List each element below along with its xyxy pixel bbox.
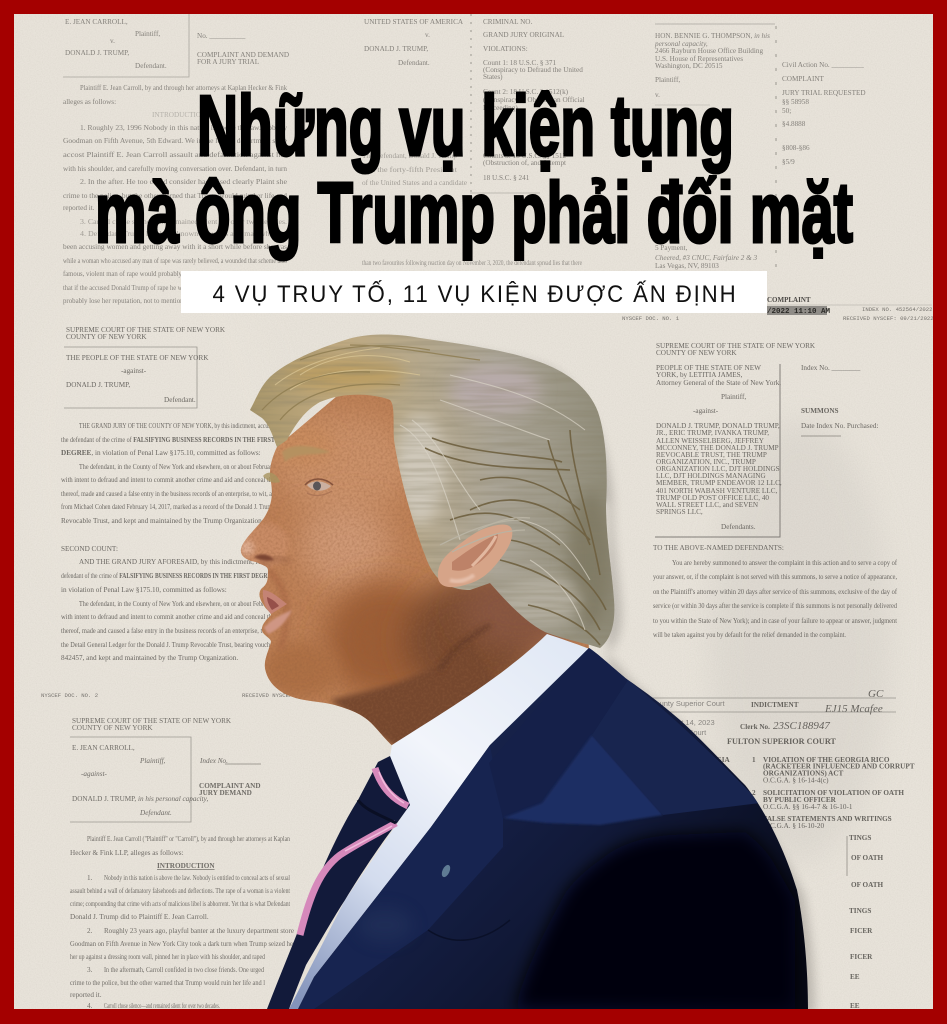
- document: E. Jean Carroll complaint, top left: COMPLAINT AND DEMAND: [197, 51, 289, 59]
- document stamps: left footer: [41, 692, 292, 699]
- document: E. Jean Carroll complaint, bottom left: Nobody in this nation is above the law. Nobody is entitled to conceal acts of sexual: [104, 874, 290, 882]
- document stamps: left footer: RECEIVED NYSCEF: [242, 692, 292, 699]
- document: Thompson civil complaint, top right: Plaintiff,: [655, 76, 680, 84]
- document: Thompson civil complaint, top right: §§ 58958: [782, 98, 809, 106]
- subtitle banner: [181, 271, 767, 313]
- document: E. Jean Carroll complaint, top left: INTRODUCTION: [152, 111, 207, 119]
- document: Thompson civil complaint, top right: v.: [655, 91, 660, 99]
- document: Letitia James summons, right: 401 NORTH WABASH VENTURE LLC,: [656, 487, 777, 495]
- document: E. Jean Carroll complaint, bottom left: 2.: [87, 927, 93, 935]
- document: Fulton County indictment, bottom right: Clerk of Court: [660, 728, 707, 737]
- document: E. Jean Carroll complaint, bottom left: COMPLAINT AND: [199, 782, 261, 790]
- document: E. Jean Carroll complaint, bottom left: Plaintiff E. Jean Carroll ("Plaintiff" or "Carroll"), by and through her attorneys at Kaplan: [87, 835, 290, 843]
- document: E. Jean Carroll complaint, bottom left: her up against a dressing room wall, pinned her in place with his shoulder, and raped: [70, 953, 265, 961]
- document: Letitia James summons, right: will be taken against you by default for the relief demanded in the complaint.: [653, 631, 846, 639]
- document: People of New York indictment, left: thereof, made and caused a false entry in the business records of an enterprise, to wit, an: [61, 490, 275, 498]
- document: Fulton County indictment, bottom right: FICER: [850, 927, 873, 935]
- document: E. Jean Carroll complaint, top left: 4. Defendant Trump had been known for years as a man who had: [80, 230, 287, 238]
- document: People of New York indictment, left: SECOND COUNT:: [61, 545, 118, 553]
- document: People of New York indictment, left: The defendant, in the County of New York and elsewhere, on or about February: [79, 463, 275, 471]
- document stamps: NYSCEF header: NYSCEF DOC. NO. 1: [622, 315, 680, 322]
- document: E. Jean Carroll complaint, top left: that if the accused Donald Trump of rape he would sue her into oblivion and she would: [63, 284, 287, 292]
- document: People of New York indictment, left: from Michael Cohen dated February 14, 2017, marked as a record of the Donald J. Trump: [61, 503, 275, 511]
- document: Letitia James summons, right: TO THE ABOVE-NAMED DEFENDANTS:: [653, 544, 784, 552]
- document: United States indictment, top centre: GRAND JURY ORIGINAL: [483, 31, 564, 39]
- document: People of New York indictment, left: thereof, made and caused a false entry in the business records of an enterprise, to wit: [61, 627, 275, 635]
- document: People of New York indictment, left: Defendant.: [164, 396, 196, 404]
- document: Fulton County indictment, bottom right: O.C.G.A. § 16-14-4(c): [763, 776, 829, 784]
- document: E. Jean Carroll complaint, bottom left: Index No.: [199, 757, 228, 765]
- document: People of New York indictment, left: THE PEOPLE OF THE STATE OF NEW YORK: [66, 354, 209, 362]
- document: Letitia James summons, right: service (or within 30 days after the service is complete if this summons is not personally delivered: [653, 602, 897, 610]
- document: United States indictment, top centre: VIOLATIONS:: [483, 45, 528, 53]
- document: Thompson civil complaint, top right: §4.8888: [782, 120, 806, 128]
- document: E. Jean Carroll complaint, bottom left: Roughly 23 years ago, playful banter at the luxury department store: [104, 927, 294, 935]
- document: Thompson civil complaint, top right: U.S. House of Representatives: [655, 55, 743, 63]
- document: Fulton County indictment, bottom right: FALSE STATEMENTS AND WRITINGS: [763, 815, 892, 823]
- document: E. Jean Carroll complaint, top left: reported it.: [63, 204, 95, 212]
- document: E. Jean Carroll complaint, bottom left: reported it.: [70, 991, 102, 999]
- document: E. Jean Carroll complaint, bottom left: Donald J. Trump did to Plaintiff E. Jean Carroll.: [70, 913, 209, 921]
- document: Letitia James summons, right: PEOPLE OF THE STATE OF NEW: [656, 364, 761, 372]
- document: United States indictment, top centre: 18 U.S.C. § 241: [483, 174, 530, 182]
- document: Letitia James summons, right: Defendants.: [721, 523, 756, 531]
- document: Fulton County indictment, bottom right: FICER: [850, 953, 873, 961]
- document: United States indictment, top centre: CRIMINAL NO.: [483, 18, 532, 26]
- document: E. Jean Carroll complaint, top left: accost Plaintiff E. Jean Carroll assault and defamation against her: [63, 151, 288, 159]
- face and neck: [240, 394, 589, 746]
- document: United States indictment, top centre: than two favourites following reaction day on November 3, 2020, the defendant spread lies that there: [362, 259, 582, 267]
- document: People of New York indictment, left: -against-: [121, 367, 147, 375]
- document: Fulton County indictment, bottom right: OF OATH: [851, 881, 884, 889]
- document: Letitia James summons, right: Index No. ________: [801, 364, 861, 372]
- document: Letitia James summons, right: on the Plaintiff's attorney within 20 days after service of this summons, exclusive of the day of: [653, 588, 898, 596]
- document: Fulton County indictment, bottom right: EJ15 Mcafee: [824, 703, 883, 715]
- document: Letitia James summons, right: LLC, DJT HOLDINGS MANAGING: [656, 472, 766, 480]
- document: E. Jean Carroll complaint, bottom left: assault behind a wall of defamatory falsehoods and deflections. The rape of a woman is a violent: [70, 887, 290, 895]
- document: E. Jean Carroll complaint, top left: [63, 14, 289, 305]
- document: Fulton County indictment, bottom right: Clerk No.: [740, 723, 770, 731]
- document: Letitia James summons, right: MCCONNEY, THE DONALD J. TRUMP: [656, 444, 779, 452]
- document: Thompson civil complaint, top right: [654, 24, 866, 270]
- hair: [245, 330, 620, 650]
- document: E. Jean Carroll complaint, top left: while a woman who accused any man of rape was rarely believed, a wounded that scheme also: [63, 257, 287, 265]
- document: Fulton County indictment, bottom right: VIOLATION OF THE GEORGIA RICO: [763, 756, 890, 764]
- document: E. Jean Carroll complaint, bottom left: Carroll chose silence—and remained silent for over two decades.: [104, 1002, 220, 1010]
- document: United States indictment, top centre: DONALD J. TRUMP,: [364, 45, 428, 53]
- document: Fulton County indictment, bottom right: [650, 688, 915, 1010]
- document: Letitia James summons, right: REVOCABLE TRUST, THE TRUMP: [656, 451, 767, 459]
- document: Fulton County indictment, bottom right: O.C.G.A. §§ 16-4-7 & 16-10-1: [763, 803, 853, 811]
- document stamps: NYSCEF header: RECEIVED NYSCEF: 09/21/2022: [843, 315, 934, 322]
- document: E. Jean Carroll complaint, bottom left: In the aftermath, Carroll confided in two close friends. One urged: [104, 966, 264, 974]
- document: Thompson civil complaint, top right: HON. BENNIE G. THOMPSON, in his: [655, 32, 770, 40]
- document: Letitia James summons, right: SUMMONS: [801, 407, 839, 415]
- document: E. Jean Carroll complaint, bottom left: Hecker & Fink LLP, alleges as follows:: [70, 849, 184, 857]
- necktie: [267, 756, 410, 1009]
- document: Letitia James summons, right: You are hereby summoned to answer the complaint in this action and to serve a copy of: [672, 559, 898, 567]
- document: E. Jean Carroll complaint, top left: DONALD J. TRUMP,: [65, 49, 129, 57]
- document: E. Jean Carroll complaint, bottom left: COUNTY OF NEW YORK: [72, 724, 153, 732]
- document: United States indictment, top centre: UNITED STATES OF AMERICA: [364, 18, 464, 26]
- document: Letitia James summons, right: ORGANIZATION LLC, DJT HOLDINGS: [656, 465, 780, 473]
- document: Thompson civil complaint, top right: COMPLAINT: [782, 75, 825, 83]
- document: E. Jean Carroll complaint, bottom left: E. JEAN CARROLL,: [72, 744, 135, 752]
- portrait: Donald Trump in profile: [235, 330, 815, 1014]
- title: [95, 79, 853, 261]
- document: People of New York indictment, left: in violation of Penal Law §175.10, committed as follows:: [61, 586, 227, 594]
- subtitle banner: 4 VỤ TRUY TỐ, 11 VỤ KIỆN ĐƯỢC ẤN ĐỊNH: [212, 280, 738, 308]
- document: United States indictment, top centre: was the forty-fifth President: [362, 166, 457, 174]
- document: E. Jean Carroll complaint, bottom left: Defendant.: [139, 809, 172, 817]
- document: E. Jean Carroll complaint, top left: FOR A JURY TRIAL: [197, 58, 259, 66]
- document: Letitia James summons, right: SUPREME COURT OF THE STATE OF NEW YORK: [656, 342, 816, 350]
- document: E. Jean Carroll complaint, top left: Plaintiff,: [135, 30, 160, 38]
- document: People of New York indictment, left: The defendant, in the County of New York and elsewhere, on or about February: [79, 600, 275, 608]
- shirt and collar: [289, 634, 592, 1009]
- document: E. Jean Carroll complaint, bottom left: Plaintiff,: [139, 757, 166, 765]
- document: Fulton County indictment, bottom right: 1: [752, 756, 756, 764]
- document: E. Jean Carroll complaint, bottom left: 3.: [87, 966, 93, 974]
- document: E. Jean Carroll complaint, top left: famous, violent man of rape would probably lose everything and no one would ever: [63, 270, 288, 278]
- document: Letitia James summons, right: YORK, by LETITIA JAMES,: [656, 371, 743, 379]
- document: Letitia James summons, right: COUNTY OF NEW YORK: [656, 349, 737, 357]
- document: E. Jean Carroll complaint, top left: alleges as follows:: [63, 98, 116, 106]
- document: E. Jean Carroll complaint, bottom left: INTRODUCTION: [157, 862, 215, 870]
- document: Fulton County indictment, bottom right: EE: [850, 1002, 860, 1010]
- document: People of New York indictment, left: [61, 326, 276, 662]
- document: Thompson civil complaint, top right: Washington, DC 20515: [655, 62, 723, 70]
- document: E. Jean Carroll complaint, top left: Goodman on Fifth Avenue, 5th Edward. We in the luxury department store: [63, 137, 287, 145]
- document: Thompson civil complaint, top right: personal capacity,: [654, 40, 708, 48]
- document: People of New York indictment, left: COUNTY OF NEW YORK: [66, 333, 147, 341]
- document: E. Jean Carroll complaint, top left: crime to the police, but the other warned that Trump would ruin her life and: [63, 192, 287, 200]
- document: United States indictment, top centre: [362, 14, 585, 267]
- document: People of New York indictment, left: SUPREME COURT OF THE STATE OF NEW YORK: [66, 326, 226, 334]
- document: United States indictment, top centre: States): [483, 73, 503, 81]
- document: Letitia James summons, right: TRUMP OLD POST OFFICE LLC, 40: [656, 494, 769, 502]
- document: Thompson civil complaint, top right: Las Vegas, NV, 89103: [655, 262, 719, 270]
- document: E. Jean Carroll complaint, top left: E. JEAN CARROLL,: [65, 18, 128, 26]
- icon: lapel pin: [440, 864, 452, 878]
- document: Letitia James summons, right: -against-: [693, 407, 719, 415]
- document: Fulton County indictment, bottom right: 2: [752, 789, 756, 797]
- document: E. Jean Carroll complaint, top left: probably lose her reputation, not to mention everything she had worked for in life: [63, 297, 287, 305]
- document: Fulton County indictment, bottom right: ORGANIZATIONS) ACT: [763, 770, 844, 778]
- document: E. Jean Carroll complaint, bottom left: crime to the police, but the other warned that Trump would ruin her life and l: [70, 979, 265, 987]
- document: Thompson civil complaint, top right: 50;: [782, 107, 791, 115]
- document: People of New York indictment, left: AND THE GRAND JURY AFORESAID, by this indictment, further: [79, 558, 276, 566]
- document: People of New York indictment, left: with intent to defraud and intent to commit another crime and aid and conceal the: [61, 476, 275, 484]
- document: Fulton County indictment, bottom right: TINGS: [849, 907, 871, 915]
- document: Fulton County indictment, bottom right: EE: [850, 973, 860, 981]
- document: E. Jean Carroll complaint, bottom left: DONALD J. TRUMP, in his personal capacity,: [72, 795, 208, 803]
- document: E. Jean Carroll complaint, top left: 1. Roughly 23, 1996 Nobody in this nation is above the law. Nobody: [80, 124, 287, 132]
- document: Fulton County indictment, bottom right: County Superior Court: [650, 699, 726, 708]
- document: People of New York indictment, left: with intent to defraud and intent to commit another crime and aid and conceal the: [61, 613, 275, 621]
- document: Letitia James summons, right: to you within the State of New York); and in case of your failure to appear or answer, judgment: [653, 617, 897, 625]
- document: Fulton County indictment, bottom right: INDICTMENT: [751, 701, 799, 709]
- document: People of New York indictment, left: DEGREE, in violation of Penal Law §175.10, committed as follows:: [61, 449, 261, 457]
- document: Fulton County indictment, bottom right: O.C.G.A. § 16-10-20: [763, 822, 824, 830]
- document: Fulton County indictment, bottom right: FULTON SUPERIOR COURT: [727, 737, 836, 746]
- document: United States indictment, top centre: (Conspiracy to Obstruct an Official: [483, 96, 585, 104]
- document: Fulton County indictment, bottom right: (RACKETEER INFLUENCED AND CORRUPT: [763, 762, 915, 770]
- document: Thompson civil complaint, top right: §808-§86: [782, 144, 810, 152]
- document: Letitia James summons, right: Date Index No. Purchased:: [801, 422, 878, 430]
- document: Fulton County indictment, bottom right: BY PUBLIC OFFICER: [763, 796, 837, 804]
- document: People of New York indictment, left: DONALD J. TRUMP,: [66, 381, 130, 389]
- document: E. Jean Carroll complaint, top left: Defendant.: [135, 62, 167, 70]
- document: Fulton County indictment, bottom right: August 14, 2023: [660, 718, 715, 727]
- document stamps: left footer: NYSCEF DOC. NO. 2: [41, 692, 98, 699]
- document: E. Jean Carroll complaint, bottom left: JURY DEMAND: [199, 789, 252, 797]
- document: Thompson civil complaint, top right: 2466 Rayburn House Office Building: [655, 47, 763, 55]
- document: Thompson civil complaint, top right: JURY TRIAL REQUESTED: [782, 89, 866, 97]
- document: Letitia James summons, right: ALLEN WEISSELBERG, JEFFREY: [656, 437, 765, 445]
- document: Thompson civil complaint, top right: §5/9: [782, 158, 795, 166]
- document: United States indictment, top centre: Count 2: 18 U.S.C. § 1512(k): [483, 88, 569, 96]
- ear: [438, 518, 530, 587]
- document: Letitia James summons, right: ORGANIZATION, INC., TRUMP: [656, 458, 756, 466]
- document: E. Jean Carroll complaint, bottom left: -against-: [81, 770, 108, 778]
- document: E. Jean Carroll complaint, bottom left: 4.: [87, 1002, 93, 1010]
- document: E. Jean Carroll complaint, top left: been accusing women and getting away with it a short while before she was: [63, 243, 287, 251]
- document: People of New York indictment, left: the defendant of the crime of FALSIFYING BUSINESS RECORDS IN THE FIRST: [61, 436, 275, 444]
- document: United States indictment, top centre: The Defendant, Donald J. Trump: [362, 152, 457, 160]
- document: E. Jean Carroll complaint, top left: 3. Carroll chose silence and remained silent for over two decades.: [80, 218, 287, 226]
- document: United States indictment, top centre: Counts 3: 18 U.S.C. §§ 1512: [483, 152, 566, 160]
- document: Letitia James summons, right: WALL STREET LLC, and SEVEN: [656, 501, 759, 509]
- document stamps: NYSCEF header: /2022 11:10 AM: [767, 308, 831, 316]
- document: E. Jean Carroll complaint, bottom left: SUPREME COURT OF THE STATE OF NEW YORK: [72, 717, 232, 725]
- document: Fulton County indictment, bottom right: OF OATH: [851, 854, 884, 862]
- document: Thompson civil complaint, top right: Civil Action No. _________: [782, 61, 864, 69]
- document stamps: NYSCEF header: [620, 296, 934, 322]
- document: E. Jean Carroll complaint, top left: 2. In the after. He too could consider had raised clearly Plaint she: [80, 178, 287, 186]
- document: Fulton County indictment, bottom right: SOLICITATION OF VIOLATION OF OATH: [763, 789, 904, 797]
- document: Fulton County indictment, bottom right: 23SC188947: [773, 720, 830, 732]
- document: United States indictment, top centre: of the United States and a candidate: [362, 179, 467, 187]
- document: Letitia James summons, right: Plaintiff,: [721, 393, 746, 401]
- document: Letitia James summons, right: MEMBER, TRUMP ENDEAVOR 12 LLC,: [656, 479, 782, 487]
- document: E. Jean Carroll complaint, top left: with his shoulder, and carefully moving conversation over. Defendant, in turn: [63, 165, 287, 173]
- document: People of New York indictment, left: THE GRAND JURY OF THE COUNTY OF NEW YORK, by this indictment, accuses: [79, 422, 275, 430]
- document: United States indictment, top centre: Defendant.: [398, 59, 430, 67]
- document: United States indictment, top centre: Count 1: 18 U.S.C. § 371: [483, 59, 556, 67]
- document: Fulton County indictment, bottom right: GC: [868, 688, 884, 700]
- document: United States indictment, top centre: v.: [425, 31, 430, 39]
- document: United States indictment, top centre: Proceeding): [483, 104, 518, 112]
- document: E. Jean Carroll complaint, top left: No. __________: [197, 32, 246, 40]
- nostril and eye details: [254, 446, 333, 634]
- document: E. Jean Carroll complaint, bottom left: crime; compounding that crime with acts of malicious libel is abhorrent. Yet that is what Defendant: [70, 900, 290, 908]
- document: E. Jean Carroll complaint, bottom left: [70, 717, 296, 1010]
- document: Letitia James summons, right: SPRINGS LLC,: [656, 508, 703, 516]
- drop shadow behind portrait: [352, 343, 815, 1014]
- document: E. Jean Carroll complaint, top left: v.: [110, 37, 115, 45]
- document: Letitia James summons, right: Attorney General of the State of New York,: [656, 379, 781, 387]
- document: United States indictment, top centre: (Conspiracy to Defraud the United: [483, 66, 583, 74]
- document: Letitia James summons, right: DONALD J. TRUMP, DONALD TRUMP,: [656, 422, 780, 430]
- document: Thompson civil complaint, top right: Cheered, #3 CNJC, Fairfaire 2 & 3: [655, 254, 757, 262]
- document: People of New York indictment, left: Revocable Trust, and kept and maintained by the Trump Organization.: [61, 517, 264, 525]
- document: Letitia James summons, right: [653, 342, 898, 639]
- document: Letitia James summons, right: your answer, or, if the complaint is not served with this summons, to serve a notice of appearance,: [653, 573, 897, 581]
- document: People of New York indictment, left: 842457, and kept and maintained by the Trump Organization.: [61, 654, 238, 662]
- document: Fulton County indictment, bottom right: GEORGIA: [695, 756, 731, 764]
- suit jacket: [298, 647, 808, 1009]
- document: People of New York indictment, left: the Detail General Ledger for the Donald J. Trump Revocable Trust, bearing voucher: [61, 641, 276, 649]
- document: Fulton County indictment, bottom right: TINGS: [849, 834, 871, 842]
- document: People of New York indictment, left: defendant of the crime of FALSIFYING BUSINESS RECORDS IN THE FIRST DEGREE: [61, 572, 275, 580]
- document: Letitia James summons, right: JR., ERIC TRUMP, IVANKA TRUMP,: [656, 429, 769, 437]
- document stamps: NYSCEF header: INDEX NO. 452564/2022: [862, 306, 932, 313]
- document: E. Jean Carroll complaint, bottom left: 1.: [87, 874, 93, 882]
- document: E. Jean Carroll complaint, bottom left: Goodman on Fifth Avenue in New York City took a dark turn when Trump seized her: [70, 940, 296, 948]
- document: Thompson civil complaint, top right: 5 Payment,: [655, 244, 688, 252]
- document stamps: NYSCEF header: COMPLAINT: [767, 296, 811, 304]
- document: United States indictment, top centre: (Obstruction of, and Attempt: [483, 159, 566, 167]
- document: E. Jean Carroll complaint, top left: Plaintiff E. Jean Carroll, by and through her attorneys at Kaplan Hecker & Fink: [80, 84, 287, 92]
